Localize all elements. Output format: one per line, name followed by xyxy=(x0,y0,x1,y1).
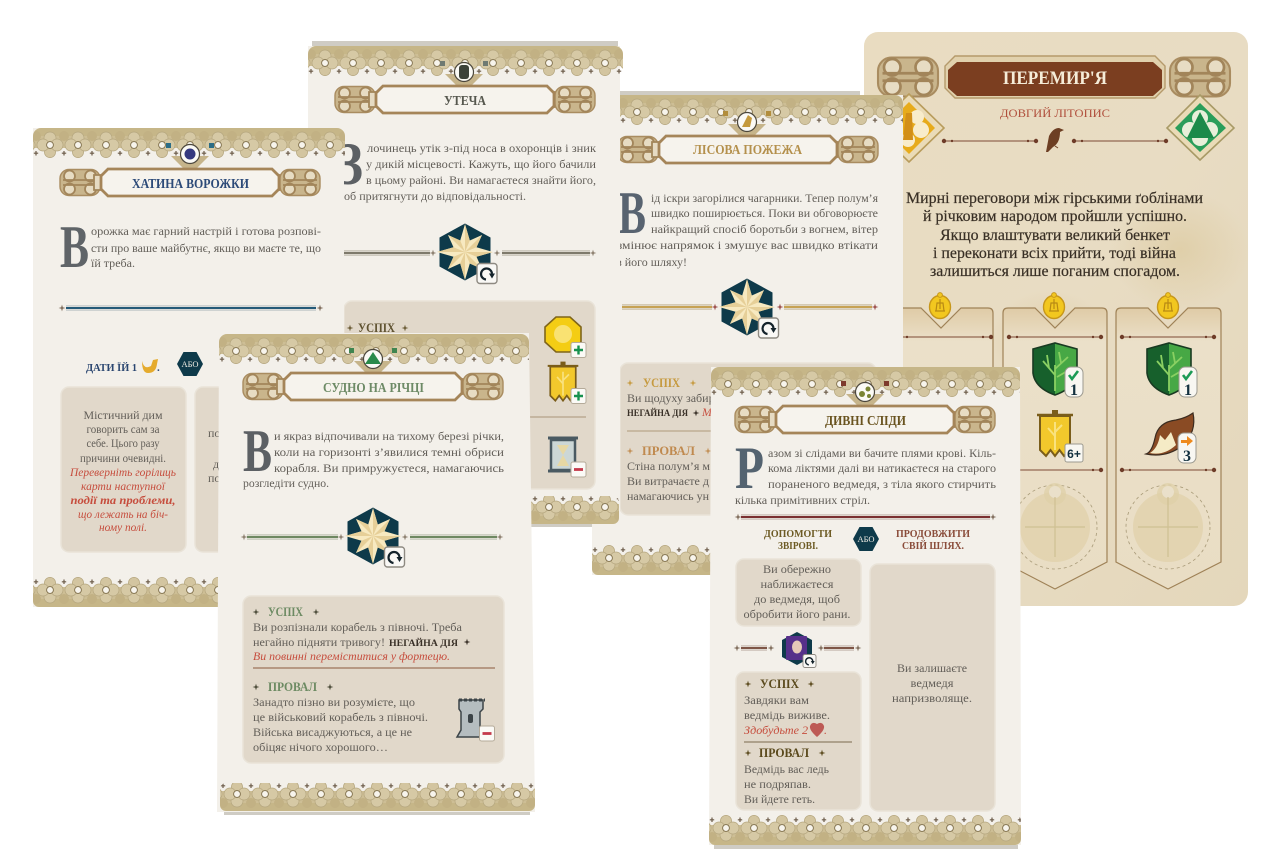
icon: green shield xyxy=(1147,343,1197,399)
body text: і переконати всіх прийти, тоді війна xyxy=(933,245,1176,262)
option panel 1: причини очевидні. xyxy=(80,451,166,465)
outcome panel: НЕГАЙНА ДІЯ xyxy=(389,638,459,648)
story text: у дикій місцевості. Кажуть, що його бачили xyxy=(366,157,597,171)
column 2 xyxy=(1003,293,1107,589)
icon: yellow banner xyxy=(1037,410,1083,462)
card: Перемир'я xyxy=(864,32,1250,606)
top ornament xyxy=(592,95,903,129)
column 3 xyxy=(1116,293,1221,589)
body text: Мирні переговори між гірськими ґоблінами xyxy=(906,190,1203,207)
story text: лочинець утік з-під носа в охоронців і зник xyxy=(367,141,596,155)
icon: green shield: 1 xyxy=(1184,382,1192,399)
story text: З xyxy=(336,131,363,197)
card: Хатина ворожки xyxy=(33,128,345,607)
icon: green shield: 1 xyxy=(1070,382,1078,399)
icon: raven with divider xyxy=(942,128,1168,152)
outcome panel: обіцяє нічого хорошого… xyxy=(253,740,388,754)
medallion xyxy=(841,381,889,413)
title banner: СУДНО НА РІЧЦІ xyxy=(323,381,424,396)
story text: найкращий спосіб боротьби з вогнем, вітер xyxy=(651,222,878,236)
story text xyxy=(60,214,321,280)
outcome panel: це військовий корабель з півночі. xyxy=(253,710,428,724)
option panel 1: себе. Цього разу xyxy=(86,436,160,450)
story text: ід іскри загорілися чагарники. Тепер полум’я xyxy=(651,191,878,205)
outcome panel: Ви щодуху забир xyxy=(627,391,715,405)
story text: їй треба. xyxy=(91,256,135,270)
story text: В xyxy=(60,214,89,280)
outcome panel: Ви розпізнали корабель з півночі. Треба xyxy=(253,620,463,634)
option panel 1: карти наступної xyxy=(81,479,166,493)
icon: fox tail xyxy=(1146,413,1196,465)
outcome panel: УСПІХ xyxy=(358,321,395,335)
option panel A: обробити його рани. xyxy=(744,607,850,621)
title banner xyxy=(335,86,595,113)
story text: азом зі слідами ви бачите плями крові. Кіль- xyxy=(768,446,996,460)
card: Дивні сліди xyxy=(709,367,1021,849)
title banner: ХАТИНА ВОРОЖКИ xyxy=(132,177,249,192)
title banner: ЛІСОВА ПОЖЕЖА xyxy=(693,143,803,158)
icon: compass hex xyxy=(437,224,497,284)
option panel 2: д xyxy=(213,457,219,471)
option panel B: ведмедя xyxy=(910,676,954,690)
outcome panel xyxy=(736,672,861,810)
bottom ornament xyxy=(220,783,535,811)
icon: purple book hex xyxy=(782,632,816,668)
story text: кома ліктями далі ви натикаєтеся на старого xyxy=(768,461,996,475)
card: Судно на річці xyxy=(217,333,535,815)
icon: green shield xyxy=(1033,343,1083,399)
outcome panel: негайно підняти тривогу! xyxy=(253,635,385,649)
title banner xyxy=(60,169,320,196)
option panel 2: по xyxy=(208,426,220,440)
choice: help: ЗВІРОВІ. xyxy=(778,540,818,552)
card: Лісова пожежа xyxy=(592,91,903,575)
story text xyxy=(243,418,505,490)
story text: и якраз відпочивали на тихому березі річки, xyxy=(274,429,504,443)
outcome panel xyxy=(243,596,504,763)
option panel A: до ведмедя, щоб xyxy=(754,592,840,606)
icon: compass hex xyxy=(719,278,778,338)
body text: залишиться лише поганим спогадом. xyxy=(930,263,1180,280)
title banner xyxy=(618,136,878,163)
icon: gold coin xyxy=(545,317,586,358)
medallion xyxy=(166,143,214,175)
option panel 1: ному полі. xyxy=(99,520,147,534)
coin placeholder xyxy=(1013,483,1097,569)
icon: green diamond xyxy=(1167,95,1234,160)
top ornament xyxy=(308,46,623,80)
option panel A: наближаєтеся xyxy=(760,577,834,591)
icon: compass hex xyxy=(345,508,404,567)
story text xyxy=(735,435,997,507)
option panel 1: події та проблеми, xyxy=(70,493,176,507)
medallion xyxy=(723,111,771,143)
column 1 xyxy=(890,293,993,589)
outcome panel: ПРОВАЛ xyxy=(759,746,810,760)
story text: змінює напрямок і змушує вас швидко втікати xyxy=(617,238,879,252)
medallion xyxy=(440,61,488,93)
top ornament xyxy=(219,334,529,368)
outcome panel: УСПІХ xyxy=(760,677,799,691)
story text: пораненого ведмедя, з тіла якого стирчить xyxy=(768,477,997,491)
story text: кілька примітивних стріл. xyxy=(735,493,870,507)
icon: yellow diamond xyxy=(874,94,944,162)
bottom ornament xyxy=(33,577,344,607)
outcome panel: НЕГАЙНА ДІЯ xyxy=(627,408,688,418)
outcome panel: ведмідь виживе. xyxy=(744,708,830,722)
outcome panel xyxy=(344,301,595,489)
outcome panel: Ви витрачаєте д xyxy=(627,474,709,488)
story text: в цьому районі. Ви намагаєтеся знайти його, xyxy=(366,173,596,187)
story text: з його шляху! xyxy=(617,255,687,269)
story text: корабля. Ви примружуєтеся, намагаючись xyxy=(274,461,505,475)
title banner xyxy=(878,56,1230,98)
option panel A: Ви обережно xyxy=(763,562,831,576)
outcome panel: Ви повинні переміститися у фортецю. xyxy=(253,649,450,663)
bottom ornament xyxy=(592,545,903,575)
story text: швидко поширюється. Поки ви обговорюєте xyxy=(651,206,878,220)
outcome panel: ПРОВАЛ xyxy=(642,444,696,458)
body text: й річковим народом пройшли успішно. xyxy=(923,208,1187,225)
story text xyxy=(336,131,597,203)
choice: help: ДОПОМОГТИ xyxy=(764,528,832,540)
body text xyxy=(906,190,1203,280)
story text xyxy=(617,180,879,269)
icon: fox tail: 3 xyxy=(1183,448,1191,465)
story text: об притягнути до відповідальності. xyxy=(344,189,526,203)
outcome panel: не подряпав. xyxy=(744,777,811,791)
option panel 1 xyxy=(61,387,186,552)
story text: розгледіти судно. xyxy=(243,476,329,490)
icon: tower xyxy=(457,700,494,741)
option panel 1: говорить сам за xyxy=(86,422,160,436)
subtitle: ДОВГИЙ ЛІТОПИС xyxy=(1000,106,1110,120)
option panel 2 xyxy=(195,387,320,552)
coin placeholder xyxy=(1126,483,1210,569)
outcome panel: УСПІХ xyxy=(268,605,303,619)
divider xyxy=(59,305,323,311)
icon: or hexagon xyxy=(177,352,203,376)
outcome panel: Занадто пізно ви розумієте, що xyxy=(253,695,415,709)
icon: yellow banner: 6+ xyxy=(1067,447,1081,461)
option panel 1: Містичний дим xyxy=(84,408,163,422)
choice: help xyxy=(764,528,832,552)
title banner xyxy=(735,406,995,433)
outcome panel: Стіна полум’я м xyxy=(627,459,710,473)
choice label: . xyxy=(157,362,160,374)
outcome panel: М xyxy=(701,405,713,419)
outcome panel: Війська висаджуються, а це не xyxy=(253,725,412,739)
option panel B xyxy=(870,564,995,811)
bottom ornament xyxy=(709,815,1021,845)
choice label xyxy=(86,359,160,374)
divider xyxy=(735,514,996,520)
outcome panel: Завдяки вам xyxy=(744,693,809,707)
story text: коли на горизонті з’явилися темні обриси xyxy=(274,445,505,459)
option panel B: Ви залишаєте xyxy=(897,661,967,675)
outcome panel: намагаючись ун xyxy=(627,489,710,503)
outcome panel: . xyxy=(824,723,827,737)
top ornament xyxy=(711,367,1020,401)
story text: В xyxy=(243,418,272,484)
choice: continue: ПРОДОВЖИТИ xyxy=(896,528,970,540)
icon: heart xyxy=(810,723,824,737)
option panel 2: по xyxy=(208,471,220,485)
title banner: УТЕЧА xyxy=(444,94,487,109)
option panel 1: Переверніть горілиць xyxy=(69,465,177,479)
icon: yellow banner xyxy=(548,362,586,404)
story text: В xyxy=(618,180,646,246)
outcome panel: УСПІХ xyxy=(643,376,680,390)
outcome panel xyxy=(620,363,876,515)
outcome panel: Здобудьте 2 xyxy=(744,723,808,737)
top ornament xyxy=(33,128,345,162)
story text: сти про ваше майбутнє, якщо ви маєте те, що xyxy=(91,241,321,255)
body text: Якщо влаштувати великий бенкет xyxy=(940,227,1170,244)
dividers xyxy=(344,250,596,256)
icon: hourglass scroll xyxy=(548,438,586,477)
story text: орожка має гарний настрій і готова розпові- xyxy=(91,224,321,238)
title banner xyxy=(243,373,503,400)
option panel A xyxy=(736,559,861,626)
title banner: ДИВНІ СЛІДИ xyxy=(825,414,906,429)
story text: Р xyxy=(735,435,764,501)
dividers xyxy=(622,304,878,310)
outcome panel: ПРОВАЛ xyxy=(268,680,318,694)
outcome panel: Ви йдете геть. xyxy=(744,792,815,806)
dividers xyxy=(734,645,861,651)
choice label: ДАТИ ЇЙ 1 xyxy=(86,361,137,374)
icon: or hexagon xyxy=(853,527,879,551)
card: Утеча xyxy=(308,41,623,527)
option panel 1: що лежать на бiч- xyxy=(78,507,168,521)
choice: continue xyxy=(896,528,970,552)
bottom ornament xyxy=(308,496,619,524)
choice: continue: СВІЙ ШЛЯХ. xyxy=(902,540,964,552)
option panel B: напризволяще. xyxy=(892,691,972,705)
medallion xyxy=(349,348,397,380)
title banner: ПЕРЕМИР'Я xyxy=(1003,68,1107,89)
outcome panel: Ведмідь вас ледь xyxy=(744,762,830,776)
dividers xyxy=(241,534,503,540)
